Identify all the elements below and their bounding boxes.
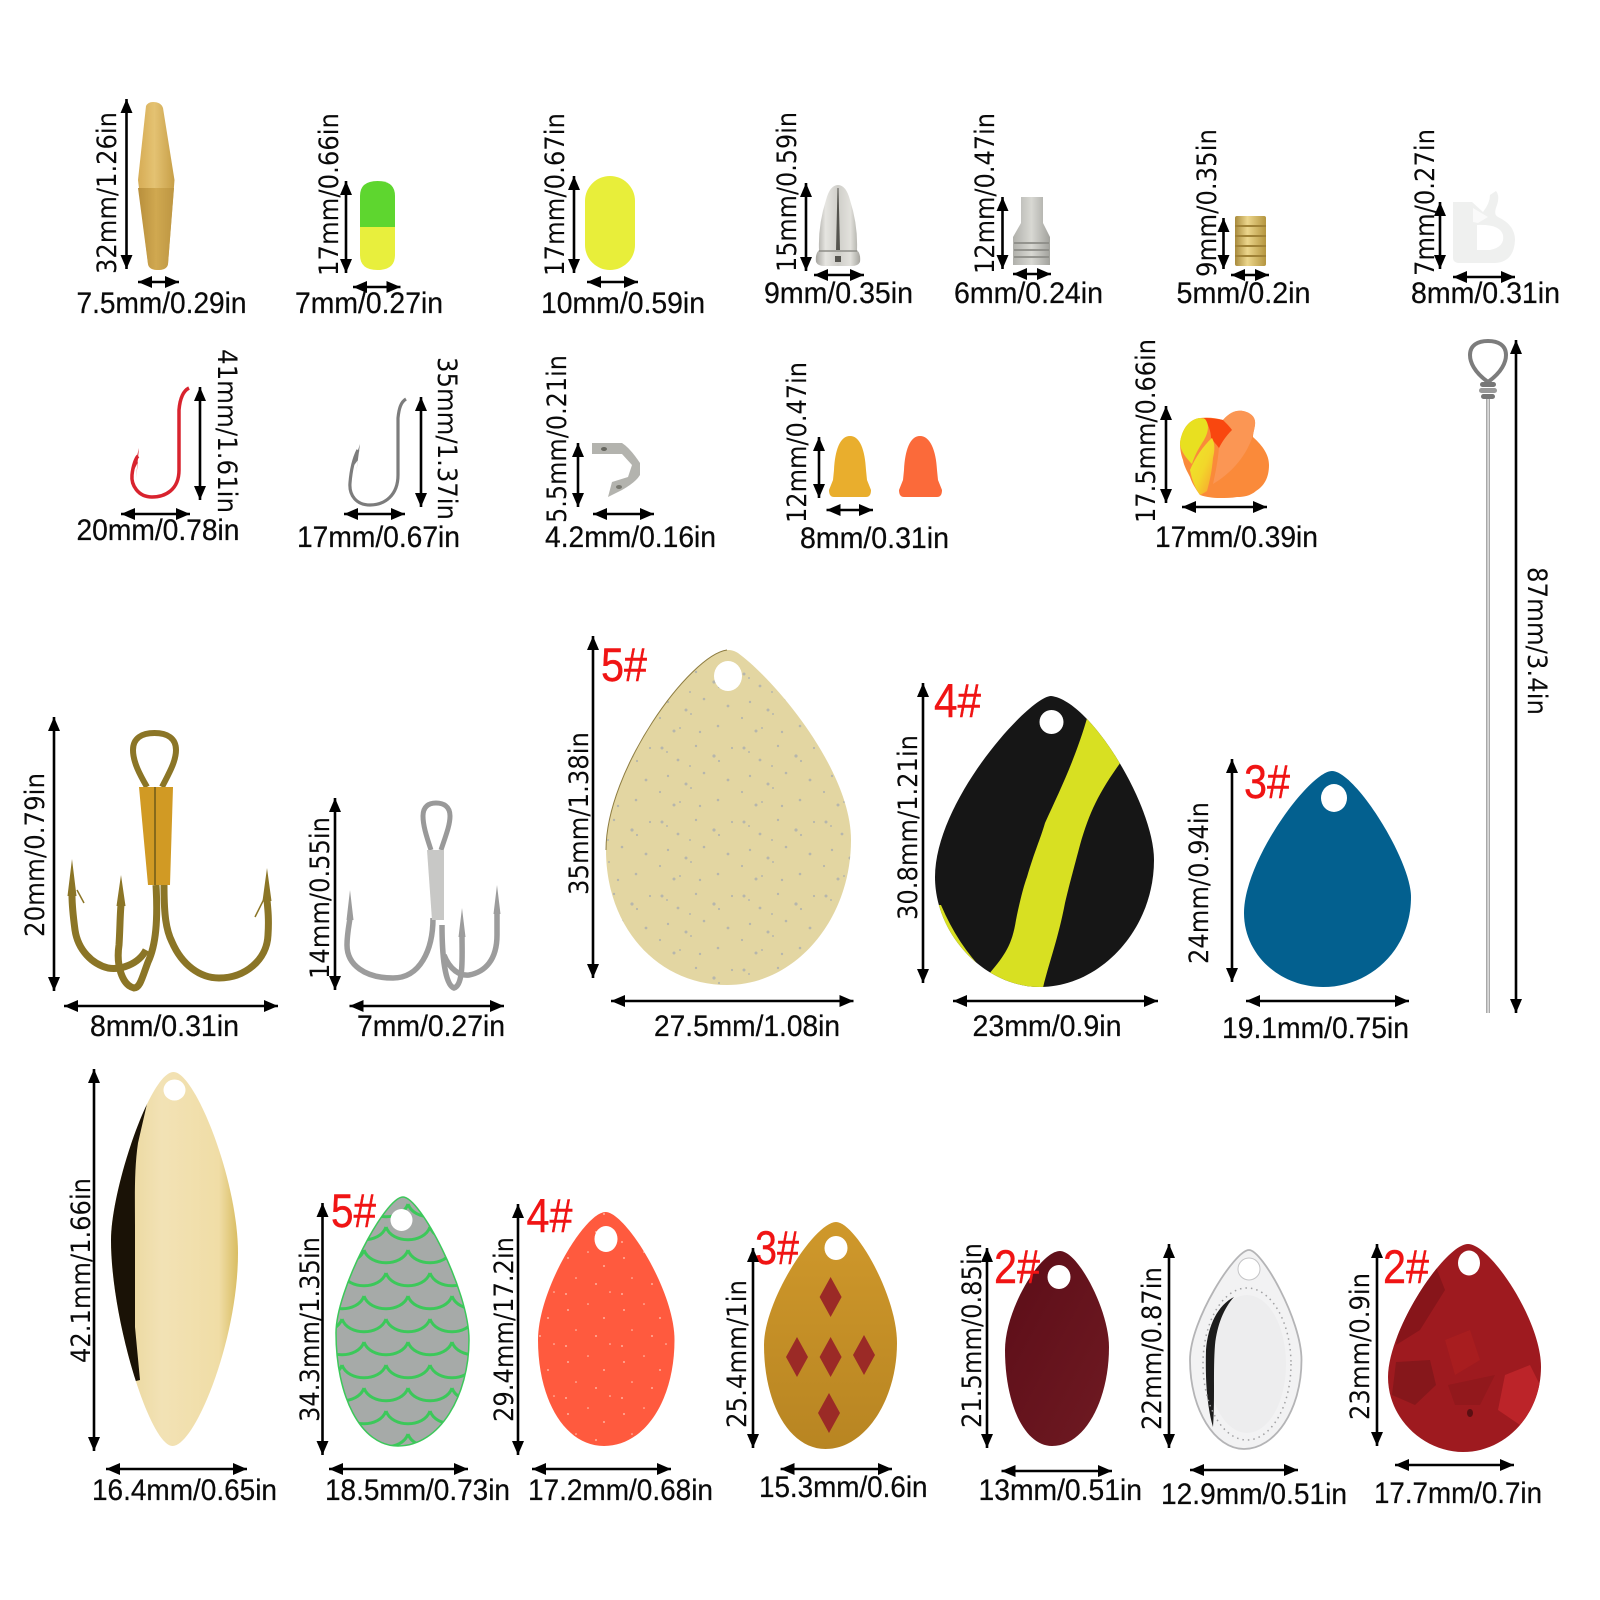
arrow: height bbox=[1231, 759, 1233, 982]
icon: black blade bbox=[935, 696, 1154, 987]
icon: silver hook bbox=[350, 399, 406, 505]
label: width: 7mm/0.27in bbox=[295, 287, 443, 320]
icon: white clip bbox=[1453, 191, 1515, 263]
label: width: 4.2mm/0.16in bbox=[545, 521, 716, 554]
label: width: 5mm/0.2in bbox=[1176, 277, 1310, 310]
arrow: width bbox=[593, 513, 654, 515]
item: metal clevis bbox=[542, 355, 716, 554]
item: gold treble hook bbox=[20, 717, 278, 1043]
icon: dark red blade bbox=[1005, 1251, 1109, 1446]
icon: gold treble hook bbox=[133, 733, 176, 787]
label: height: 5.5mm/0.21in bbox=[542, 355, 573, 523]
label: height: 12mm/0.47in bbox=[782, 362, 813, 523]
label: width: 6mm/0.24in bbox=[954, 277, 1103, 310]
item: silver bullet weight bbox=[764, 112, 913, 310]
icon: scale blade bbox=[336, 1197, 469, 1446]
item: silver hammered blade bbox=[1137, 1244, 1347, 1511]
item: painted bullet weights bbox=[782, 362, 949, 555]
arrow: width bbox=[1190, 1469, 1298, 1471]
arrow: width bbox=[953, 1000, 1158, 1002]
icon: brass sleeve bbox=[138, 102, 174, 270]
label: height: 17mm/0.66in bbox=[314, 113, 345, 276]
arrow: width bbox=[1002, 1470, 1112, 1472]
arrow: height bbox=[577, 443, 579, 507]
arrow: width bbox=[781, 1468, 892, 1470]
arrow: height bbox=[805, 183, 807, 271]
label: height: 20mm/0.79in bbox=[20, 773, 51, 937]
label: width: 7mm/0.27in bbox=[357, 1010, 505, 1043]
label: width: 23mm/0.9in bbox=[972, 1010, 1122, 1043]
item: 2# red holographic blade bbox=[1345, 1240, 1545, 1510]
item: white clip bbox=[1410, 129, 1560, 310]
item: 4# black and yellow blade bbox=[893, 674, 1158, 1043]
item: 3# blue blade bbox=[1184, 755, 1411, 1045]
arrow: width bbox=[1013, 273, 1051, 275]
arrow: width bbox=[532, 1468, 671, 1470]
size tag: 4# bbox=[526, 1189, 572, 1242]
icon: capsule bbox=[360, 181, 395, 227]
arrow: height bbox=[345, 181, 347, 273]
arrow: width bbox=[1246, 1000, 1409, 1002]
label: width: 8mm/0.31in bbox=[90, 1010, 239, 1043]
item: silver treble hook bbox=[305, 798, 505, 1043]
size tag: 4# bbox=[934, 674, 981, 727]
item: silver hook bbox=[297, 357, 462, 554]
arrow: height bbox=[1001, 197, 1004, 269]
arrow: width bbox=[350, 1005, 504, 1007]
item: gold willow blade bbox=[66, 1069, 277, 1507]
arrow: height bbox=[1439, 202, 1441, 269]
item: yellow float bbox=[540, 113, 705, 320]
label: width: 16.4mm/0.65in bbox=[92, 1474, 277, 1507]
arrow: width bbox=[611, 1000, 854, 1002]
label: height: 21.5mm/0.85in bbox=[957, 1243, 988, 1428]
label: height: 30.8mm/1.21in bbox=[893, 735, 924, 920]
label: width: 17mm/0.67in bbox=[297, 521, 460, 554]
arrow: height bbox=[517, 1204, 519, 1455]
icon: yellow capsule bbox=[585, 176, 635, 270]
item: brass bait sleeve bbox=[76, 99, 246, 320]
label: height: 22mm/0.87in bbox=[1137, 1267, 1168, 1430]
arrow: width bbox=[138, 281, 179, 283]
icon: stem bbox=[1013, 197, 1050, 265]
icon: coral blade bbox=[538, 1212, 674, 1446]
size tag: 5# bbox=[331, 1184, 376, 1237]
arrow: width bbox=[826, 509, 873, 511]
item: 5# scale pattern blade bbox=[295, 1184, 510, 1507]
size tag: 3# bbox=[1244, 755, 1290, 808]
label: width: 8mm/0.31in bbox=[800, 522, 949, 555]
arrow: height bbox=[321, 1203, 324, 1455]
label: length: 87mm/3.4in bbox=[1521, 567, 1552, 715]
icon: silver treble hook bbox=[423, 803, 450, 850]
arrow: height bbox=[986, 1248, 988, 1448]
arrow: width bbox=[1395, 1464, 1514, 1466]
icon: wire shaft bbox=[1470, 341, 1506, 382]
arrow: width bbox=[1231, 274, 1269, 276]
arrow: height bbox=[592, 636, 594, 978]
label: height: 14mm/0.55in bbox=[305, 817, 336, 979]
item: 2# dark red blade bbox=[957, 1240, 1142, 1507]
arrow: length bbox=[1515, 340, 1517, 1013]
size tag: 5# bbox=[601, 638, 647, 691]
icon: blue blade bbox=[1244, 771, 1411, 987]
size tag: 2# bbox=[994, 1240, 1040, 1293]
item: red hook bbox=[76, 349, 242, 547]
label: height: 42.1mm/1.66in bbox=[66, 1178, 97, 1363]
arrow: width bbox=[587, 281, 638, 283]
arrow: height bbox=[53, 717, 55, 991]
label: width: 10mm/0.59in bbox=[541, 287, 705, 320]
label: height: 24mm/0.94in bbox=[1184, 802, 1215, 964]
icon: amber blade bbox=[764, 1222, 897, 1449]
arrow: width bbox=[353, 286, 400, 288]
item: 5# gold spinner blade bbox=[564, 636, 854, 1043]
arrow: height bbox=[420, 397, 422, 507]
icon: brass cylinder bbox=[1235, 216, 1266, 266]
arrow: width bbox=[1453, 276, 1515, 278]
item: 4# coral blade bbox=[489, 1189, 713, 1507]
label: height: 17.5mm/0.66in bbox=[1131, 339, 1162, 523]
size tag: 2# bbox=[1383, 1240, 1429, 1293]
item: green and yellow capsule float bbox=[295, 113, 443, 320]
label: height: 35mm/1.38in bbox=[564, 732, 595, 895]
arrow: width bbox=[344, 513, 405, 515]
label: height: 32mm/1.26in bbox=[92, 112, 123, 274]
label: width: 20mm/0.78in bbox=[76, 514, 240, 547]
icon: red holographic blade bbox=[1388, 1244, 1541, 1452]
icon: gold blade bbox=[606, 650, 851, 985]
label: width: 13mm/0.51in bbox=[978, 1474, 1142, 1507]
label: height: 7mm/0.27in bbox=[1410, 129, 1441, 276]
item: orange knot bead bbox=[1131, 339, 1318, 554]
label: height: 41mm/1.61in bbox=[211, 349, 242, 513]
label: width: 19.1mm/0.75in bbox=[1222, 1012, 1409, 1045]
arrow: height bbox=[1168, 1244, 1170, 1448]
icon: willow blade bbox=[111, 1072, 238, 1446]
label: height: 17mm/0.67in bbox=[540, 113, 571, 276]
arrow: width bbox=[106, 1468, 247, 1470]
icon: red hook bbox=[132, 388, 189, 497]
label: width: 18.5mm/0.73in bbox=[325, 1474, 510, 1507]
label: height: 25.4mm/1in bbox=[722, 1280, 753, 1428]
label: width: 8mm/0.31in bbox=[1411, 277, 1560, 310]
arrow: height bbox=[125, 99, 128, 269]
icon: coral weight bbox=[899, 436, 942, 497]
arrow: height bbox=[573, 176, 575, 273]
arrow: height bbox=[752, 1248, 754, 1448]
arrow: height bbox=[818, 437, 820, 498]
size tag: 3# bbox=[755, 1221, 799, 1274]
icon: bullet weight bbox=[816, 185, 860, 266]
label: height: 12mm/0.47in bbox=[970, 113, 1001, 274]
item: brass cylinder bbox=[1176, 129, 1310, 310]
label: width: 12.9mm/0.51in bbox=[1161, 1478, 1347, 1511]
icon: clevis bbox=[592, 443, 640, 497]
label: width: 17.2mm/0.68in bbox=[528, 1474, 713, 1507]
label: width: 17.7mm/0.7in bbox=[1374, 1477, 1542, 1510]
arrow: width bbox=[1182, 506, 1267, 508]
item: wire shaft bbox=[1470, 340, 1552, 1013]
item: stem connector bbox=[954, 113, 1103, 310]
arrow: width bbox=[329, 1468, 468, 1470]
arrow: height bbox=[1222, 218, 1225, 269]
label: width: 9mm/0.35in bbox=[764, 277, 913, 310]
label: height: 9mm/0.35in bbox=[1192, 129, 1223, 277]
label: width: 17mm/0.39in bbox=[1155, 521, 1318, 554]
arrow: width bbox=[121, 513, 190, 515]
arrow: height bbox=[334, 798, 336, 990]
label: width: 7.5mm/0.29in bbox=[76, 287, 246, 320]
arrow: height bbox=[1165, 406, 1167, 503]
label: width: 27.5mm/1.08in bbox=[654, 1010, 840, 1043]
icon: knot bead bbox=[1180, 411, 1269, 498]
arrow: height bbox=[199, 387, 201, 500]
arrow: height bbox=[1376, 1244, 1378, 1446]
arrow: height bbox=[922, 683, 924, 983]
label: height: 34.3mm/1.35in bbox=[295, 1237, 326, 1422]
arrow: width bbox=[64, 1005, 278, 1007]
label: height: 23mm/0.9in bbox=[1345, 1273, 1376, 1420]
label: height: 29.4mm/17.2in bbox=[489, 1237, 520, 1422]
label: height: 35mm/1.37in bbox=[431, 357, 462, 520]
icon: silver blade bbox=[1190, 1250, 1302, 1449]
label: width: 15.3mm/0.6in bbox=[759, 1471, 928, 1504]
icon: yellow weight bbox=[829, 436, 871, 497]
item: 3# amber diamond blade bbox=[722, 1221, 928, 1504]
arrow: height bbox=[93, 1069, 95, 1451]
label: height: 15mm/0.59in bbox=[772, 112, 803, 272]
arrow: width bbox=[814, 274, 864, 276]
